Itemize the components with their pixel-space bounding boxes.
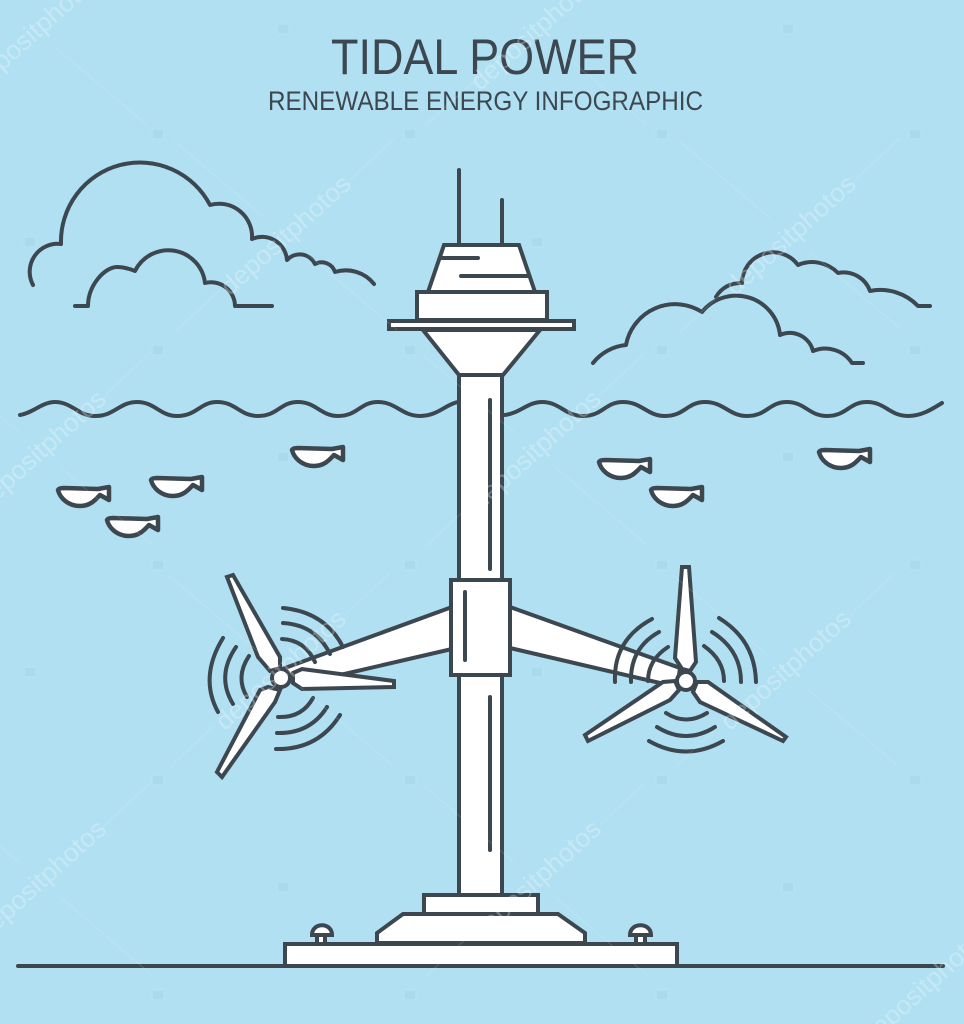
stock watermark overlay: depositphotos xyxy=(464,383,607,516)
fish 4 xyxy=(292,447,343,466)
collar box xyxy=(451,580,510,675)
fish school xyxy=(58,447,870,536)
fish 3 xyxy=(107,517,158,536)
right hub xyxy=(677,672,695,690)
fish 1 xyxy=(58,487,109,506)
large cloud outline xyxy=(30,163,374,285)
water swirl arcs right turbine xyxy=(615,618,756,752)
right bolt xyxy=(630,925,651,944)
funnel xyxy=(423,330,540,375)
left arm xyxy=(285,607,452,680)
fish 6 xyxy=(651,487,702,506)
right turbine xyxy=(510,567,786,752)
stock watermark overlay: depositphotos xyxy=(209,603,352,736)
stock watermark overlay: depositphotos xyxy=(714,603,857,736)
left bolt xyxy=(312,925,332,944)
left turbine xyxy=(210,575,452,777)
right rotor blades xyxy=(675,567,696,671)
ground line xyxy=(18,964,943,968)
stock watermark overlay: depositphotos xyxy=(214,168,357,301)
collar detail line xyxy=(463,592,467,660)
cabin detail lines xyxy=(442,258,528,276)
base plate xyxy=(285,944,677,966)
clouds left xyxy=(30,163,374,306)
left hub xyxy=(272,669,290,687)
fish 5 xyxy=(599,459,650,478)
waves xyxy=(20,402,942,416)
right wave xyxy=(505,402,942,416)
left wave xyxy=(20,402,458,416)
fish 2 xyxy=(151,477,202,496)
right arm xyxy=(510,607,680,683)
small cloud outline xyxy=(75,250,272,306)
tower shaft xyxy=(459,375,502,895)
heading: tidal power: TIDAL POWER xyxy=(331,29,639,85)
antennas xyxy=(459,170,502,245)
base upper step xyxy=(424,895,538,914)
cabin block xyxy=(417,292,547,320)
tower collar xyxy=(451,580,510,675)
clouds right xyxy=(593,252,930,363)
base middle step xyxy=(377,914,585,943)
stock watermark overlay: depositphotos xyxy=(719,168,862,301)
title block xyxy=(268,29,703,116)
tidal turbine tower xyxy=(285,170,677,966)
fish 7 xyxy=(819,449,870,468)
water swirl arcs left turbine xyxy=(210,608,343,749)
shaft detail lines xyxy=(488,400,492,850)
upper cabin xyxy=(428,245,535,292)
front cloud outline xyxy=(593,296,863,363)
platform deck xyxy=(389,321,574,329)
stock watermark overlay: depositphotos xyxy=(464,813,607,946)
subheading: RENEWABLE ENERGY INFOGRAPHIC xyxy=(268,86,703,116)
left rotor blades xyxy=(227,575,280,671)
back cloud outline xyxy=(716,252,930,306)
